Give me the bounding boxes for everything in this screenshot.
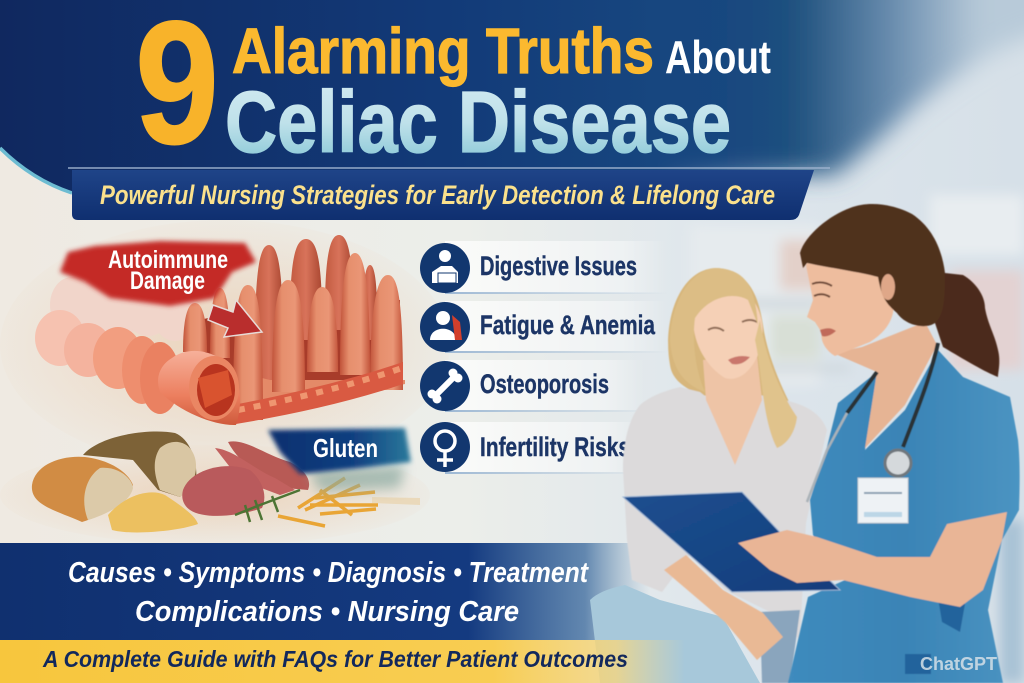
- herb: [235, 490, 300, 522]
- subtitle ribbon: Powerful Nursing Strategies for Early Detection & Lifelong Care: [100, 180, 775, 210]
- hair front: [670, 268, 758, 392]
- face: [806, 252, 894, 356]
- label: Gluten: [268, 428, 411, 492]
- shredded pasta: [108, 492, 198, 532]
- item: Infertility Risks: Infertility Risks: [480, 432, 630, 462]
- tube opening: [189, 356, 239, 420]
- arrow: [208, 300, 262, 337]
- header banner: [0, 0, 1024, 193]
- hair: [800, 204, 945, 326]
- patient: [623, 268, 827, 683]
- symptoms list: [420, 241, 667, 474]
- hair back: [668, 268, 797, 448]
- item: Fatigue & Anemia: Fatigue & Anemia: [480, 310, 656, 340]
- yellow guide band: [0, 640, 685, 683]
- title line: Alarming Truths About: About: [665, 31, 771, 83]
- ear: [881, 274, 895, 300]
- header curved accent: [0, 148, 72, 193]
- face features: [812, 282, 832, 297]
- nurse: [623, 204, 1020, 683]
- front villi: [183, 253, 403, 420]
- table with cloth: [590, 585, 760, 683]
- nurse arm and hand: [738, 512, 1007, 607]
- tissue base: [236, 372, 405, 422]
- neck: [703, 355, 762, 465]
- label: Gluten: Gluten: [313, 433, 378, 463]
- label: Autoimmune Damage: [60, 241, 256, 306]
- illustration: intestine: [0, 220, 450, 470]
- topics text: Causes • Symptoms • Diagnosis • Treatment: [68, 557, 589, 589]
- pocket shade: [938, 598, 965, 632]
- watermark: ChatGPT: [920, 654, 997, 674]
- item: Osteoporosis: [420, 360, 655, 412]
- crusty bread: [32, 457, 133, 522]
- watermark patch: [905, 654, 931, 674]
- badge: [858, 478, 908, 523]
- label: Autoimmune Damage: Damage: [130, 267, 205, 295]
- bottom blue band: [0, 543, 650, 640]
- label: Autoimmune Damage: Autoimmune: [108, 246, 228, 274]
- front rings: [35, 310, 180, 414]
- tube body: [158, 351, 240, 425]
- lower bumps: [238, 368, 402, 410]
- blurred clinic background: [690, 195, 1024, 683]
- topics text: Complications • Nursing Care: [135, 596, 519, 628]
- tissue lower band: [236, 362, 403, 424]
- dark gaps behind villi: [185, 300, 400, 410]
- topics text: [68, 557, 589, 628]
- stethoscope: [807, 343, 938, 502]
- pale wheat stalks: [372, 497, 420, 505]
- ponytail: [935, 273, 999, 377]
- skirt: [760, 610, 800, 683]
- subtitle ribbon: [68, 168, 830, 220]
- yellow guide band: A Complete Guide with FAQs for Better Patient Outcomes: [42, 646, 628, 672]
- dark seeded loaf: [83, 431, 196, 497]
- scrubs: [788, 350, 1020, 683]
- item: Osteoporosis: Osteoporosis: [480, 369, 609, 399]
- item: Digestive Issues: [420, 241, 667, 294]
- neck: [833, 322, 937, 448]
- face features: [708, 320, 757, 331]
- clipboard: [623, 492, 840, 592]
- pale back rings: [50, 277, 197, 341]
- item: Digestive Issues: Digestive Issues: [480, 251, 637, 281]
- face: [693, 290, 763, 379]
- blouse: [623, 387, 827, 640]
- item: Infertility Risks: [420, 422, 645, 474]
- food illustration: [0, 431, 430, 545]
- title line: Alarming Truths About: Alarming Truths: [232, 15, 654, 87]
- wheat sticks: [278, 478, 378, 526]
- patient forearm and hand: [664, 555, 783, 660]
- title line: Celiac Disease: Celiac Disease: [225, 74, 731, 171]
- back villi: [255, 235, 377, 380]
- raw gluten lumps: [228, 441, 309, 490]
- item: Fatigue & Anemia: [420, 301, 667, 353]
- title: [135, 0, 771, 181]
